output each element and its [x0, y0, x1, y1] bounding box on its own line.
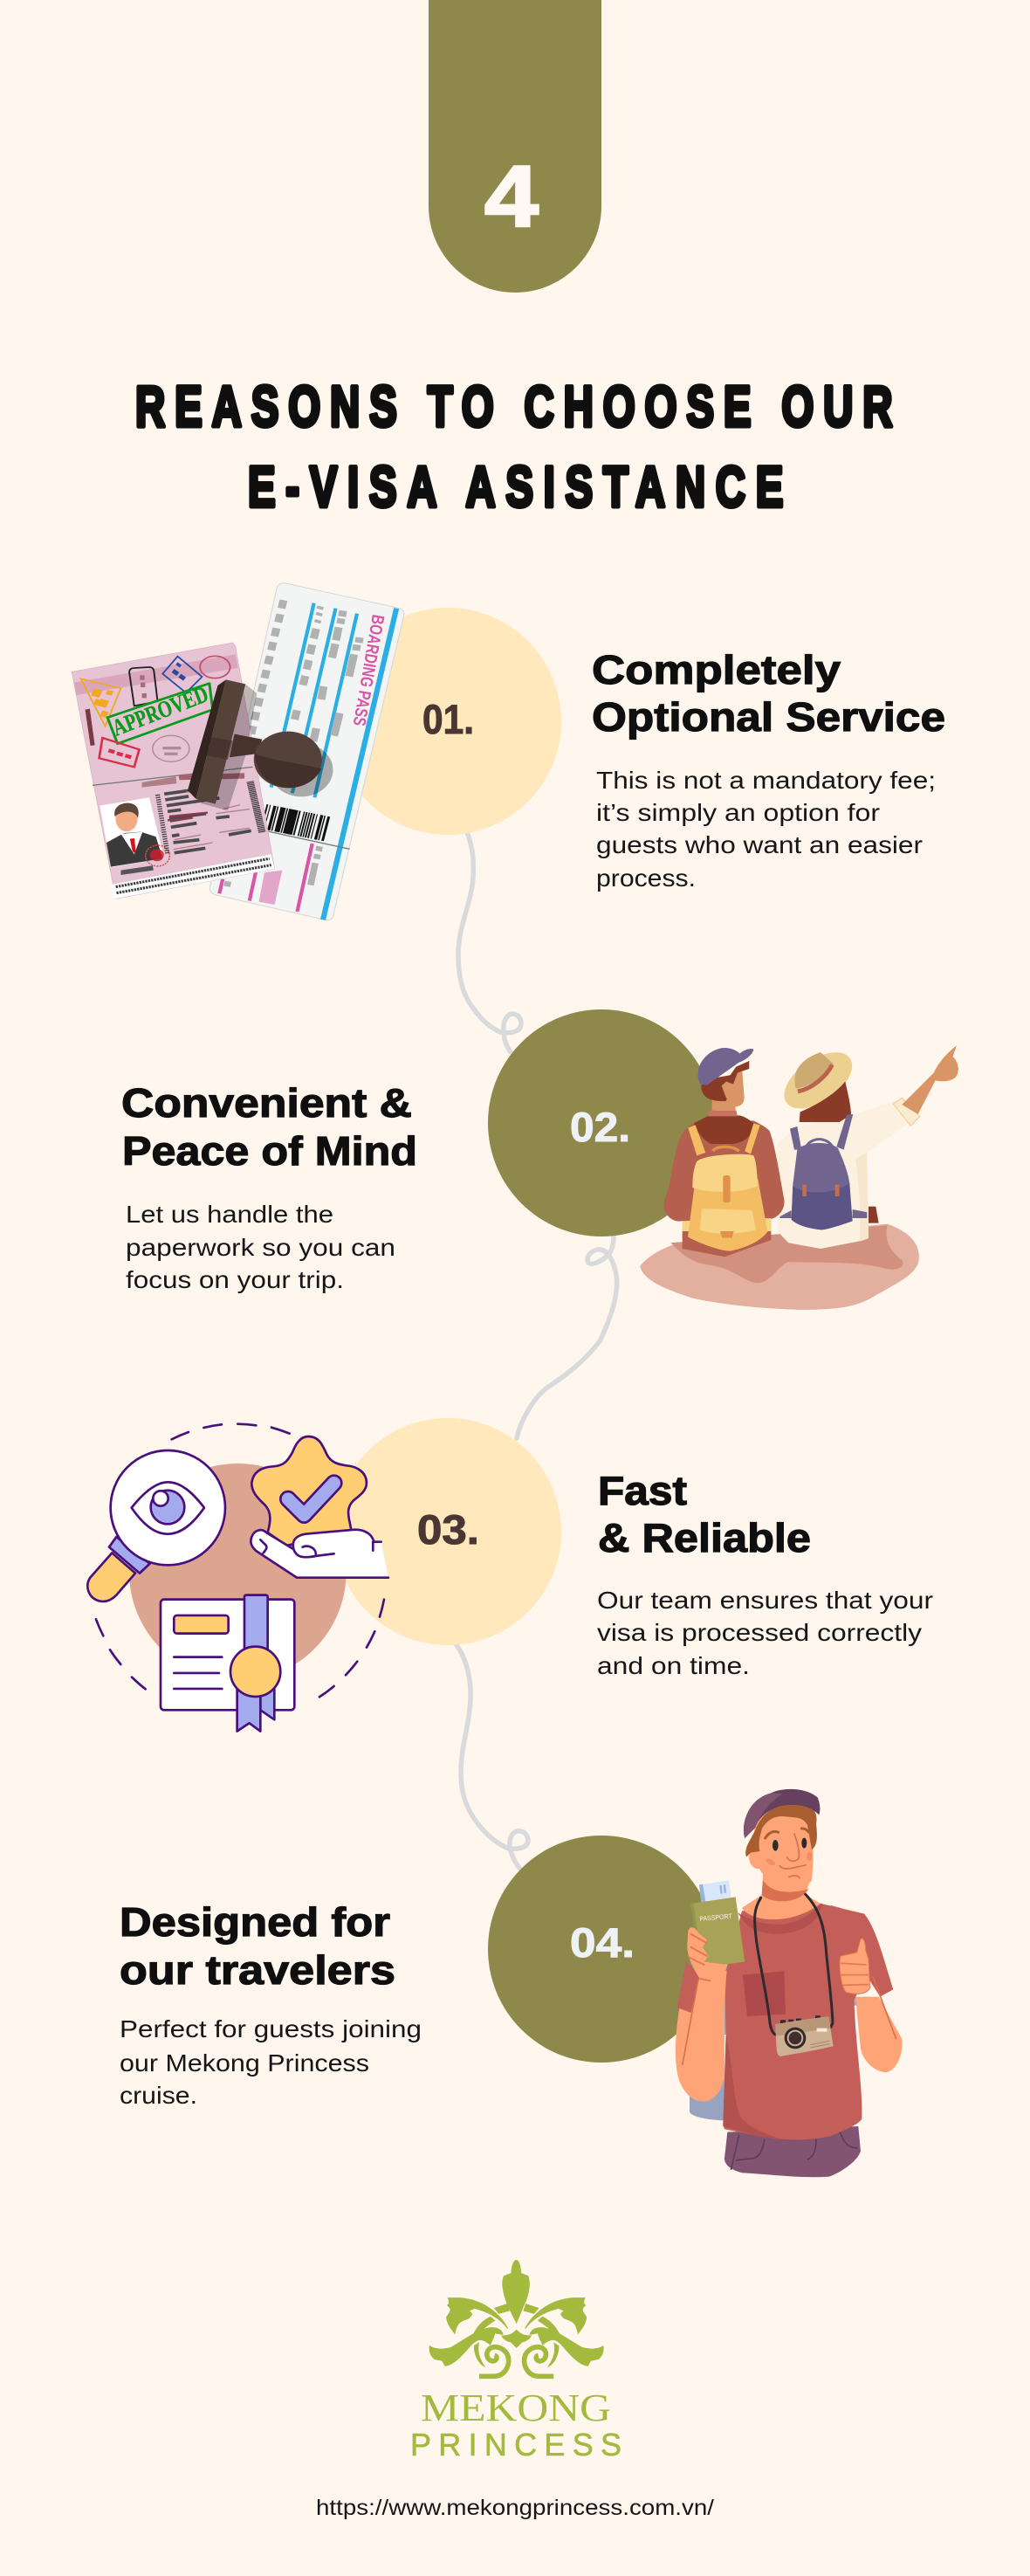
icon: two travelers sitting	[640, 1041, 958, 1310]
logo wordmark: MEKONG	[421, 2387, 611, 2429]
website url: https://www.mekongprincess.com.vn/	[316, 2496, 714, 2520]
icon: passport with stamps	[72, 643, 274, 899]
icon: rubber stamp	[188, 679, 333, 810]
step 03 circle	[334, 1418, 561, 1645]
panel: step 01	[72, 583, 945, 920]
step 02 description: Let us handle the	[126, 1201, 333, 1228]
step 01 description: it’s simply an option for	[596, 799, 880, 826]
panel: step 02	[121, 1009, 958, 1310]
icon: tourist with passport and camera: PASSPORT	[699, 1912, 732, 1923]
step 03 description: and on time.	[597, 1652, 750, 1679]
step 02 heading	[121, 1080, 417, 1174]
step 04 description: Perfect for guests joining	[120, 2015, 422, 2042]
step 03 description	[597, 1587, 933, 1679]
title	[135, 375, 893, 520]
step 02 description: paperwork so you can	[126, 1234, 395, 1261]
step 04 heading: Designed for	[120, 1899, 390, 1945]
step 03 description: Our team ensures that your	[597, 1587, 933, 1614]
step 04 circle	[488, 1836, 715, 2063]
logo: Mekong Princess	[410, 2260, 621, 2462]
icon: passport with stamps: APPROVED	[108, 680, 212, 741]
step 02 heading: Convenient &	[121, 1080, 412, 1126]
step 02 description: focus on your trip.	[126, 1266, 344, 1293]
step 03 heading: & Reliable	[598, 1515, 811, 1560]
step 02 circle	[488, 1009, 715, 1236]
step 01 heading	[592, 647, 945, 740]
logo wordmark	[410, 2387, 621, 2462]
top number badge: 4	[484, 148, 539, 245]
step 01 description	[596, 767, 936, 892]
step 01 heading: Optional Service	[592, 694, 945, 740]
panel: step 04	[120, 1789, 903, 2177]
icon: boarding pass	[209, 583, 404, 920]
step 01 circle	[334, 608, 561, 835]
connector lines between steps	[457, 832, 617, 1868]
step 03 description: visa is processed correctly	[597, 1619, 922, 1646]
step 04 description: our Mekong Princess	[120, 2049, 369, 2077]
step 02 description	[126, 1201, 395, 1293]
step 03 heading: Fast	[598, 1468, 687, 1513]
logo wordmark: PRINCESS	[410, 2427, 621, 2462]
step 02 heading: Peace of Mind	[122, 1128, 417, 1174]
icon: tourist with passport and camera	[676, 1789, 903, 2177]
logo emblem	[429, 2260, 603, 2376]
top number badge	[429, 0, 601, 293]
step 04 description: cruise.	[120, 2082, 197, 2109]
icon: boarding pass: BOARDING PASS	[349, 613, 388, 727]
title: E-VISA ASISTANCE	[248, 455, 783, 520]
step 01 heading: Completely	[592, 647, 841, 692]
step 03 heading	[598, 1468, 811, 1560]
panel: step 03	[87, 1418, 933, 1732]
step 03 number: 03.	[417, 1506, 479, 1553]
title: REASONS TO CHOOSE OUR	[135, 375, 893, 439]
step 01 description: process.	[596, 864, 696, 892]
step 01 description: This is not a mandatory fee;	[596, 767, 936, 794]
step 01 description: guests who want an easier	[596, 831, 923, 858]
step 04 number: 04.	[570, 1919, 635, 1966]
step 01 number: 01.	[422, 696, 474, 742]
step 04 heading	[120, 1899, 395, 1993]
step 02 number: 02.	[570, 1104, 630, 1150]
step 04 description	[120, 2015, 422, 2109]
step 04 heading: our travelers	[120, 1947, 395, 1993]
icon: magnifier, star and certificate	[87, 1424, 388, 1732]
